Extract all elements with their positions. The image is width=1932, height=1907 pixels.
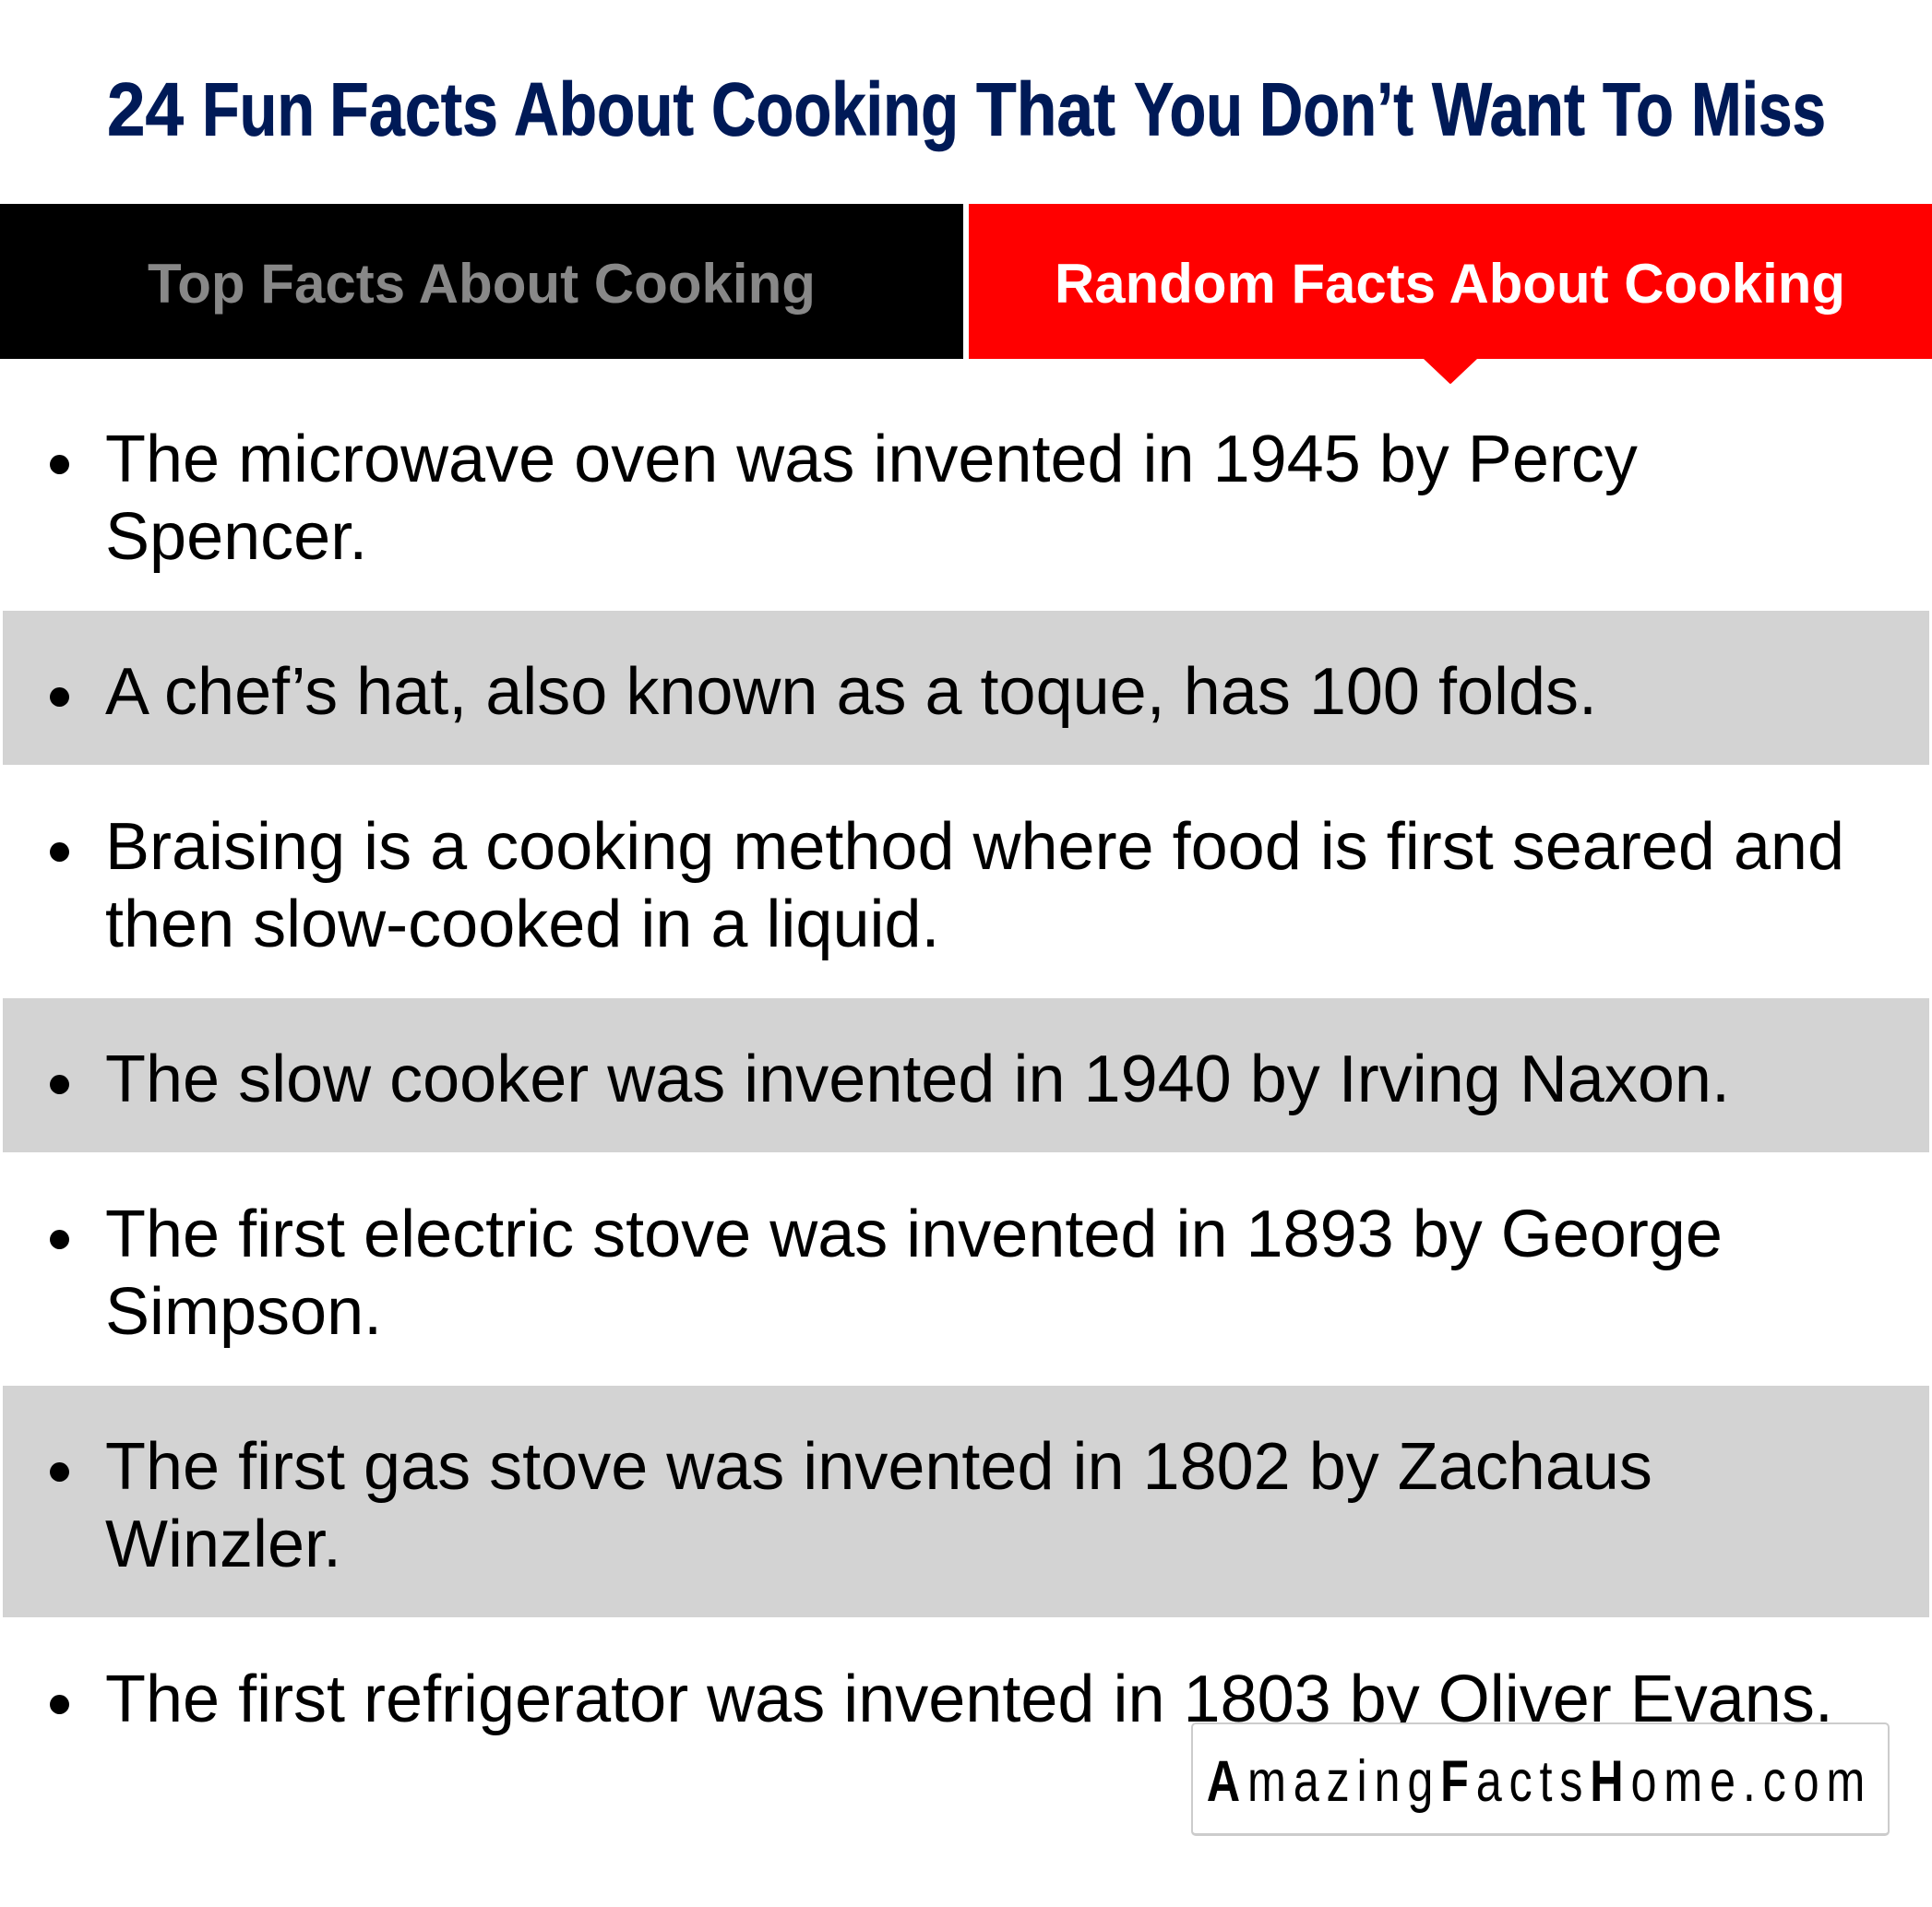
fact 5: The first electric stove was invented in 1893 by George [105,1198,1723,1271]
watermark: AmazingFactsHome.com: AmazingFactsHome.com [1207,1749,1865,1814]
title [107,68,1826,151]
fact 1 [50,423,1638,574]
fact 1: Spencer. [105,500,367,574]
tab: top facts: Top Facts About Cooking [148,253,816,315]
row band 4 [3,998,1929,1152]
fact 6: The first gas stove was invented in 1802 by Zachaus [105,1430,1652,1504]
title: Cooking [711,68,959,151]
tab: random facts with pointer: Random Facts About Cooking [1055,253,1845,315]
row band 2 [3,611,1929,765]
fact 6: Winzler. [105,1508,341,1581]
fact 1: The microwave oven was invented in 1945 by Percy [105,423,1638,496]
fact 3: then slow-cooked in a liquid. [105,888,940,961]
fact 3: Braising is a cooking method where food is first seared and [105,810,1844,884]
title: Facts [329,68,498,151]
fact 7: The first refrigerator was invented in 1803 by Oliver Evans. [105,1663,1833,1736]
tab: top facts [0,204,963,359]
title: 24 [107,68,184,151]
title: That [976,68,1115,151]
fact 5 [50,1198,1723,1349]
title: To [1603,68,1674,151]
fact 6 [50,1430,1652,1581]
watermark: AmazingFactsHome.com [1191,1722,1890,1836]
fact 3 [50,810,1844,961]
title: Miss [1691,68,1826,151]
title: Want [1432,68,1585,151]
title: Fun [202,68,315,151]
title: About [514,68,694,151]
title: Don’t [1259,68,1413,151]
fact 2: A chef’s hat, also known as a toque, has 100 folds. [105,655,1597,729]
row band 6 [3,1386,1929,1617]
tab: random facts with pointer [969,204,1932,384]
title: You [1134,68,1243,151]
fact 4: The slow cooker was invented in 1940 by Irving Naxon. [105,1043,1730,1116]
fact 5: Simpson. [105,1275,382,1349]
